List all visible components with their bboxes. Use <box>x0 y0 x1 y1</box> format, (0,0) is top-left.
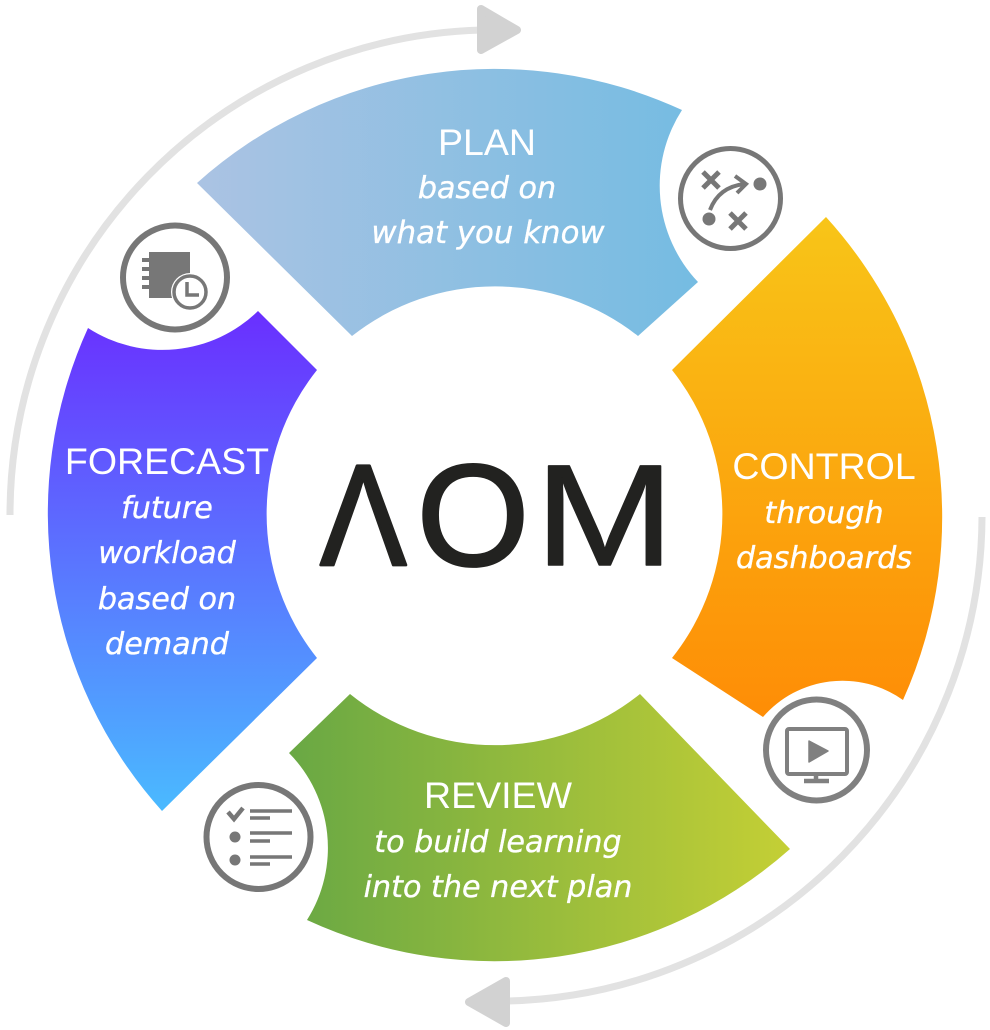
panel: plan <box>197 69 698 336</box>
plan description: what you know <box>371 215 605 251</box>
panel: control <box>672 217 942 717</box>
control description: through <box>764 496 884 531</box>
forecast heading: FORECAST <box>65 440 269 482</box>
control heading: CONTROL <box>732 445 916 487</box>
review heading: REVIEW <box>424 774 573 816</box>
control description: dashboards <box>736 541 912 576</box>
icon: monitor with play button <box>766 700 867 800</box>
logo: AOM: M <box>535 436 674 596</box>
icon: checklist <box>206 785 310 889</box>
plan heading: PLAN <box>438 121 536 163</box>
control description <box>736 496 912 576</box>
icon: notebook and clock <box>123 226 227 330</box>
forecast description: based on <box>98 582 236 617</box>
logo: AOM <box>320 435 674 597</box>
plan description <box>371 171 605 251</box>
panel: review <box>289 694 790 961</box>
forecast description: future <box>121 491 213 526</box>
plan description: based on <box>418 171 556 206</box>
logo: AOM: O <box>417 435 529 596</box>
review description <box>364 825 632 905</box>
panel: forecast <box>48 311 317 811</box>
forecast description: workload <box>98 536 237 571</box>
arrow: bottom-right circular arrow <box>469 517 982 1023</box>
icon: playbook strategy <box>680 148 780 248</box>
logo: AOM: Λ <box>320 436 407 597</box>
review description: to build learning <box>374 825 622 860</box>
review description: into the next plan <box>364 870 632 905</box>
arrow: top-left circular arrow <box>10 9 517 515</box>
forecast description: demand <box>105 627 230 662</box>
forecast description <box>98 491 237 662</box>
